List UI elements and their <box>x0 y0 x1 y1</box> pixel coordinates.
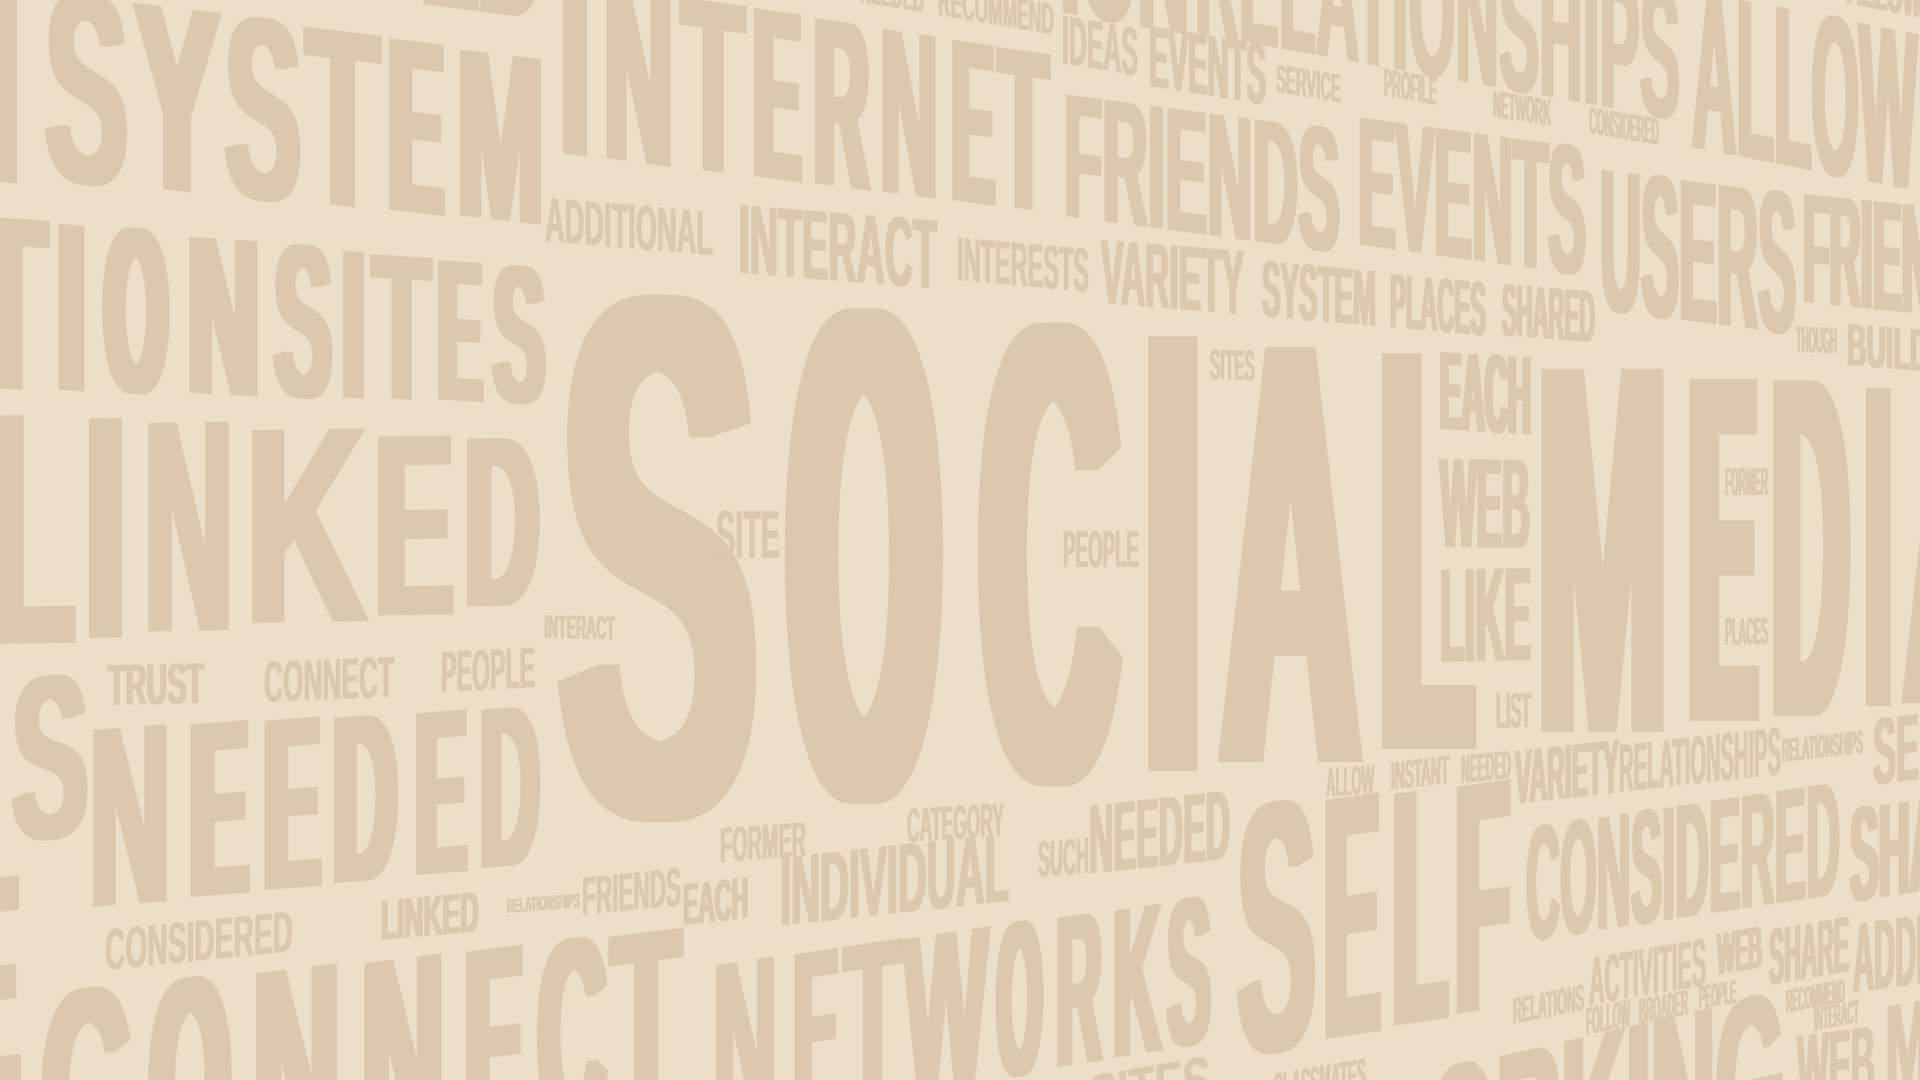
medium words: CONNECT <box>264 645 394 715</box>
headline word: SOCIAL: I <box>1149 202 1197 910</box>
small words <box>507 0 1863 1080</box>
word: TIONSITES large <box>0 164 545 447</box>
word: TIONSITES large: I <box>58 173 85 444</box>
small words: RELATIONSHIPS <box>507 889 580 917</box>
medium words: LIKE <box>1440 540 1531 691</box>
small words: LIST <box>1496 682 1531 739</box>
small words: INTERACT <box>544 608 615 647</box>
word: FRIENDS large: FRIENDS <box>1064 57 1340 291</box>
medium words: PEOPLE <box>441 635 535 705</box>
small words: SITES <box>1210 340 1255 390</box>
word: TIONSITES large: S <box>493 224 545 447</box>
medium words: SITE <box>716 497 780 573</box>
word: CONNECT large <box>41 872 681 1080</box>
headline word: MEDIA: E <box>1691 274 1755 830</box>
word: S before NEEDED: S <box>12 625 88 892</box>
medium words: VARIETY <box>1101 220 1244 335</box>
word: EVENTS large: EVENTS <box>1358 78 1586 316</box>
headline word: MEDIA: M <box>1537 257 1668 848</box>
word: LINKED large: E <box>375 380 453 673</box>
word: SELF large <box>1237 709 1509 1080</box>
headline word: SOCIAL <box>559 145 1472 979</box>
word: TIONSITES large: I <box>343 206 364 446</box>
word: NEEDED large: D <box>333 662 397 936</box>
word: NEEDED large: E <box>265 665 319 944</box>
medium words: EACH <box>1440 328 1531 459</box>
word: TIONSITES large: O <box>105 179 167 445</box>
medium words: INTERESTS <box>957 224 1089 306</box>
word: TIONSITES large: T <box>372 210 431 447</box>
word: INTERNET large: T <box>998 0 1049 263</box>
word: TIONSITES large: N <box>188 189 259 446</box>
small words: ALLOW <box>1326 756 1374 806</box>
headline word: SOCIAL: C <box>981 190 1117 924</box>
medium words: FRIENDS <box>582 856 681 927</box>
medium words: CATEGORY <box>907 793 1004 853</box>
headline word: SOCIAL: O <box>790 167 938 951</box>
word: NETWORKS large <box>713 851 1211 1080</box>
medium words: EVENTS <box>1149 8 1266 124</box>
medium words: NEEDED <box>1089 769 1230 896</box>
small words: PROFILE <box>1384 60 1437 114</box>
word: SYSTEM large <box>45 0 544 278</box>
headline word: MEDIA <box>1537 257 1920 848</box>
small words: SERVICE <box>1276 56 1341 111</box>
medium words: SUCH <box>1038 827 1089 888</box>
medium words: SYSTEM <box>1262 244 1376 344</box>
word: NEEDED large: E <box>191 667 247 952</box>
medium words: INDIVIDUAL <box>780 812 1009 948</box>
medium words: ADDITIONAL <box>545 184 713 269</box>
word: NEEDED large: N <box>90 670 170 964</box>
headline word: SOCIAL: S <box>559 145 758 979</box>
medium words: CONSIDERED <box>105 899 293 983</box>
medium words: WEB <box>1440 432 1530 576</box>
word: INTERNET large <box>563 0 1049 263</box>
word: SYSTEM large: M <box>457 0 544 278</box>
word: LINKED large: K <box>245 369 367 685</box>
headline word: MEDIA: D <box>1772 277 1849 823</box>
word: LINKED large: N <box>144 357 233 698</box>
medium words: INTERACT <box>739 184 937 311</box>
word: LINKED large: D <box>465 386 539 660</box>
word: TIONSITES large: E <box>439 218 481 446</box>
medium words: LINKED <box>381 880 479 953</box>
small words: INSTANT <box>1391 747 1449 799</box>
word: NEEDED large: E <box>416 660 466 927</box>
word: NEEDED large <box>90 656 540 964</box>
word: LINKED large: I <box>89 350 122 708</box>
medium words: EACH <box>683 865 748 938</box>
word: TIONSITES large: S <box>274 199 332 446</box>
medium words: IDEAS <box>1062 1 1138 91</box>
headline word: SOCIAL: A <box>1222 219 1359 895</box>
medium words: PEOPLE <box>1063 520 1139 578</box>
headline word: SOCIAL: L <box>1381 232 1472 876</box>
headline word: MEDIA: I <box>1866 290 1891 808</box>
medium words: PLACES <box>1390 258 1486 353</box>
medium words: FORMER <box>720 812 806 873</box>
medium words: SHARED <box>1502 268 1595 359</box>
word: LINKED large <box>0 344 539 717</box>
word: NEEDED large: D <box>480 657 540 919</box>
medium words: TRUST <box>108 651 204 718</box>
word: SELF large: F <box>1456 709 1509 1080</box>
small words: NEEDED <box>1461 742 1511 792</box>
